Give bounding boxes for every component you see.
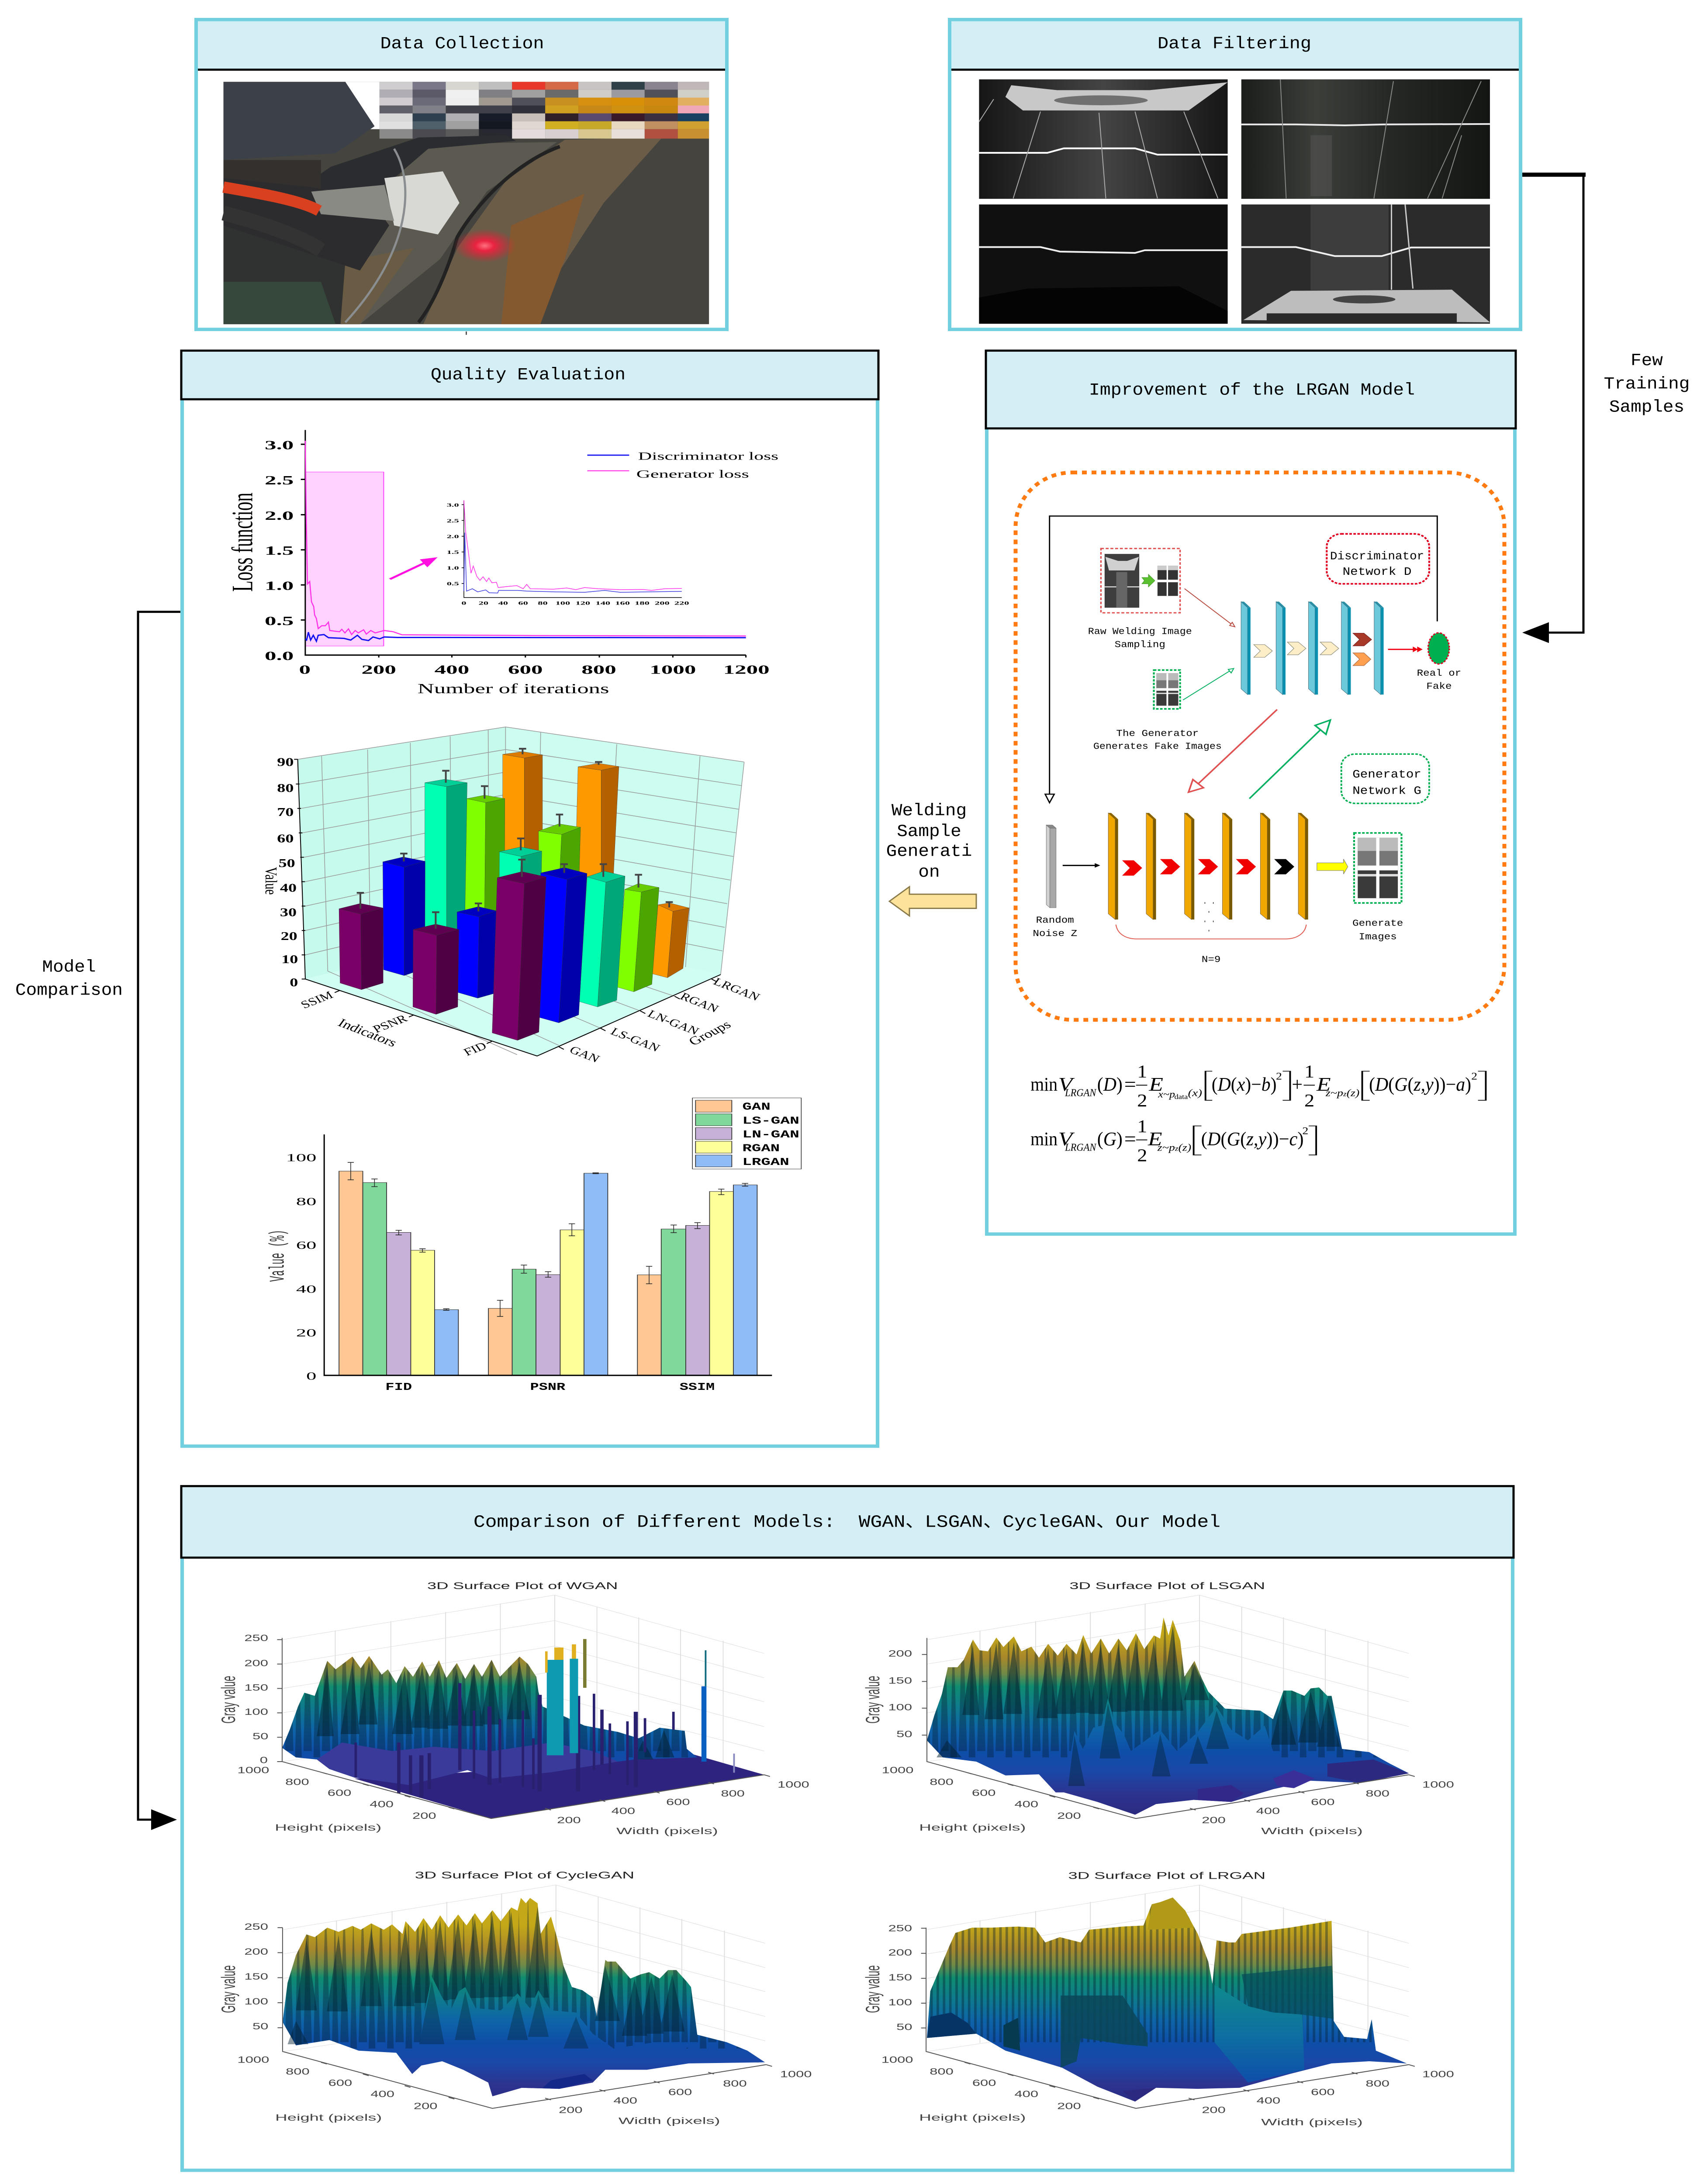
formula: discriminator loss: = (1124, 1073, 1136, 1095)
raw image sampling box (1088, 549, 1192, 650)
heading: data filtering: Data Filtering (1158, 35, 1311, 54)
plot: 3D surface of CycleGAN: 100 (244, 1996, 268, 2007)
plot: 3D surface of LRGAN: 3D Surface Plot of LRGAN (1068, 1870, 1265, 1881)
plot: 3D surface of CycleGAN: Height (pixels) (275, 2112, 382, 2123)
formula: generator loss: 1 (1137, 1116, 1147, 1136)
plot: 3D surface of LSGAN: 400 (1256, 1806, 1280, 1816)
chart: loss function curves: 1200 (723, 663, 770, 677)
legend: LN-GAN (742, 1129, 799, 1140)
plot: 3D surface of LSGAN: Width (pixels) (1261, 1826, 1363, 1836)
chart: 3D bars by indicator and group: RGAN (677, 991, 721, 1015)
chart: grouped bars FID PSNR SSIM: 80 (296, 1196, 316, 1208)
chart: grouped bars FID PSNR SSIM: FID (385, 1381, 412, 1393)
plot: 3D surface of WGAN: 50 (252, 1731, 268, 1742)
plot: 3D surface of CycleGAN: 800 (286, 2067, 310, 2077)
plot: 3D surface of LSGAN: 800 (930, 1777, 954, 1787)
chart: loss function curves: 0.0 (265, 650, 294, 663)
chart: 3D bars by indicator and group: 0 (290, 976, 298, 989)
plot: 3D surface of WGAN: Gray value (218, 1676, 239, 1724)
legend: Discriminator loss (638, 450, 778, 463)
plot: 3D surface of WGAN: 250 (244, 1633, 268, 1643)
bracket: N=9: N=9 (1202, 954, 1220, 965)
plot: 3D surface of CycleGAN: 600 (668, 2087, 692, 2098)
raw image sampling box: Sampling (1115, 639, 1165, 650)
plot: 3D surface of WGAN: 800 (721, 1789, 745, 1799)
formula: discriminator loss: (D(x)−b) (1212, 1073, 1277, 1095)
inset chart: first 220 iterations: 220 (674, 600, 689, 606)
arrow: data filtering to LRGAN model (1522, 173, 1586, 643)
error bars (357, 749, 673, 929)
chart: 3D bars by indicator and group: FID (461, 1040, 489, 1058)
plot: 3D surface of WGAN: 400 (370, 1799, 394, 1810)
generator label (1341, 754, 1429, 803)
discriminator layers (1241, 601, 1384, 695)
label: few training samples: Training (1604, 375, 1690, 394)
legend: LS-GAN (742, 1115, 799, 1127)
random noise block: Random (1036, 915, 1074, 926)
label: welding sample generation: Sample (897, 822, 961, 842)
chart: loss function curves: 3.0 (265, 439, 294, 452)
plot: 3D surface of LSGAN: 200 (1202, 1815, 1226, 1825)
chart: 3D bars by indicator and group: 20 (281, 930, 297, 943)
chart: loss function curves: 600 (508, 663, 543, 677)
plot: 3D surface of LSGAN: 600 (972, 1788, 995, 1798)
formula: generator loss: z~pz(z) (1157, 1142, 1191, 1153)
legend: LRGAN (742, 1156, 789, 1168)
generator label: Network G (1352, 785, 1421, 798)
plot: 3D surface of LRGAN: 200 (1202, 2105, 1226, 2115)
arrow: zoom to inset (390, 557, 438, 579)
real or fake output (1417, 633, 1461, 691)
inset chart: first 220 iterations: 100 (556, 600, 570, 606)
formula: discriminator loss: (x) (1188, 1088, 1202, 1099)
inset chart: first 220 iterations: 20 (479, 600, 488, 606)
arrow: feedback loop (1045, 516, 1437, 803)
chart: 3D bars by indicator and group: Groups (685, 1018, 734, 1048)
label: few training samples: Samples (1609, 398, 1684, 417)
discriminator label: Discriminator (1330, 550, 1424, 563)
fake images box: Generates Fake Images (1093, 741, 1222, 752)
inset chart: first 220 iterations: 0 (461, 600, 467, 606)
chart: loss function curves: 2.5 (265, 473, 294, 487)
chart: grouped bars FID PSNR SSIM: 40 (296, 1283, 316, 1295)
plot: 3D surface of LRGAN: Height (pixels) (919, 2112, 1026, 2123)
arrow: fake samples to discriminator (1183, 668, 1234, 700)
plot: 3D surface of CycleGAN: 1000 (238, 2055, 269, 2065)
discriminator label: Network D (1343, 566, 1411, 579)
chart: grouped bars FID PSNR SSIM (266, 1098, 801, 1393)
plot: 3D surface of LRGAN (862, 1870, 1454, 2128)
formula: discriminator loss: 2 (1304, 1090, 1314, 1110)
plot: 3D surface of CycleGAN: 250 (244, 1921, 268, 1932)
plot: 3D surface of LSGAN: Height (pixels) (919, 1822, 1026, 1833)
diagram: generator and discriminator network (1033, 516, 1461, 965)
plot: 3D surface of CycleGAN: 150 (244, 1971, 268, 1982)
plot: 3D surface of CycleGAN: 3D Surface Plot of CycleGAN (415, 1870, 634, 1881)
plot: 3D surface of LRGAN: 1000 (881, 2055, 913, 2065)
chart: grouped bars FID PSNR SSIM: 60 (296, 1239, 316, 1251)
legend: GAN (742, 1101, 771, 1113)
plot: 3D surface of CycleGAN (218, 1870, 812, 2126)
plot: 3D surface of WGAN: 600 (328, 1788, 351, 1798)
formula: discriminator loss (1030, 1061, 1486, 1110)
formula: discriminator loss: 2 (1471, 1071, 1477, 1082)
chart: loss function curves: 1.0 (265, 579, 294, 593)
label: welding sample generation: Generati (886, 842, 972, 861)
heading: data collection: Data Collection (380, 35, 544, 54)
arrow: yellow output (1317, 859, 1348, 874)
formula: discriminator loss: 1 (1304, 1061, 1314, 1082)
formula: generator loss: V (1058, 1128, 1075, 1150)
chart: grouped bars FID PSNR SSIM: Value (%) (266, 1230, 290, 1282)
plot: 3D surface of LSGAN: 1000 (1422, 1780, 1454, 1790)
chart: loss function curves: 200 (361, 663, 396, 677)
formula: discriminator loss: 2 (1137, 1090, 1147, 1110)
inset chart: first 220 iterations: 40 (498, 600, 508, 606)
chart: 3D bars by indicator and group: Indicators (335, 1016, 400, 1049)
inset chart: first 220 iterations: 2.5 (447, 518, 459, 524)
panel: data collection (194, 18, 729, 335)
chart: loss function curves: 0 (299, 663, 311, 677)
generated images (1352, 833, 1403, 942)
chart: 3D bars by indicator and group: 90 (277, 755, 294, 769)
formula: discriminator loss: x~p (1158, 1089, 1175, 1100)
plot: 3D surface of LRGAN: 50 (896, 2022, 912, 2032)
arrow: generator output to discriminator (1249, 720, 1331, 798)
plot: 3D surface of CycleGAN: 600 (328, 2078, 352, 2088)
real or fake output: Fake (1426, 681, 1452, 691)
inset chart: first 220 iterations: 120 (575, 600, 590, 606)
chart: loss function curves: Number of iterations (418, 681, 609, 697)
label: few training samples (1604, 352, 1690, 417)
chart: 3D bars by indicator and group: 50 (279, 857, 295, 870)
panel: quality evaluation (180, 350, 879, 1448)
bracket: N=9 (1116, 925, 1306, 965)
plot: 3D surface of LRGAN: 1000 (1422, 2069, 1454, 2080)
plot: 3D surface of LRGAN: 800 (1365, 2078, 1389, 2089)
real or fake output: Real or (1417, 668, 1461, 679)
label: model comparison: Model (42, 958, 96, 977)
arrow: noise to generator (1063, 863, 1100, 867)
plot: 3D surface of LRGAN: 150 (888, 1972, 912, 1983)
panel: improvement of the LRGAN model (985, 351, 1517, 1236)
formula: generator loss (1030, 1116, 1316, 1165)
generated images: Images (1359, 932, 1397, 942)
chart: 3D bars by indicator and group: LS-GAN (608, 1026, 662, 1054)
plot: 3D surface of CycleGAN: 800 (723, 2078, 747, 2089)
plot: 3D surface of CycleGAN: 200 (559, 2105, 583, 2115)
formula: generator loss: LRGAN (1065, 1141, 1097, 1153)
plot: 3D surface of LSGAN: 150 (888, 1676, 912, 1686)
plot: 3D surface of WGAN: 200 (244, 1658, 268, 1669)
formula: generator loss: = (1124, 1128, 1136, 1150)
plot: 3D surface of LSGAN: 3D Surface Plot of LSGAN (1069, 1580, 1265, 1591)
formula: discriminator loss: (D) (1097, 1073, 1123, 1095)
plot: 3D surface of WGAN (218, 1580, 809, 1836)
label: model comparison: Comparison (15, 981, 123, 1000)
formula: generator loss: 2 (1302, 1126, 1308, 1137)
plot: 3D surface of CycleGAN: 1000 (780, 2069, 812, 2080)
formula: generator loss: E (1147, 1128, 1162, 1150)
plot: 3D surface of LSGAN: Gray value (862, 1676, 884, 1724)
formula: discriminator loss: z~pz(z) (1325, 1088, 1359, 1099)
plot: 3D surface of WGAN: 100 (244, 1707, 268, 1717)
chart: 3D bars by indicator and group: PSNR (370, 1013, 410, 1035)
plot: 3D surface of CycleGAN: 200 (414, 2101, 437, 2111)
plot: 3D surface of LRGAN: 100 (888, 1997, 912, 2008)
formula: generator loss: (D(G(z,y))−c) (1201, 1128, 1304, 1150)
legend (692, 1098, 801, 1169)
formula: discriminator loss: E (1149, 1073, 1163, 1095)
chart: 3D bars by indicator and group: 10 (281, 953, 298, 966)
formula: discriminator loss: V (1058, 1073, 1075, 1095)
plot: 3D surface of CycleGAN: 400 (613, 2096, 637, 2106)
chart: 3D bars by indicator and group: GAN (567, 1044, 602, 1065)
inset chart: first 220 iterations: 1.5 (447, 549, 459, 555)
plot: 3D surface of WGAN: 1000 (238, 1765, 269, 1776)
heading: comparison of different models: Comparison of Different Models: WGAN、LSGAN、CycleGAN、Our Model (474, 1513, 1220, 1532)
photo: welding robot with laser on pipe (224, 82, 709, 324)
heading: quality evaluation: Quality Evaluation (431, 366, 626, 385)
chart: grouped bars FID PSNR SSIM: PSNR (530, 1381, 565, 1393)
plot: 3D surface of WGAN: 3D Surface Plot of WGAN (427, 1580, 618, 1591)
inset chart: first 220 iterations: 200 (655, 600, 670, 606)
formula: discriminator loss: 1 (1137, 1061, 1147, 1082)
inset chart: first 220 iterations: 2.0 (447, 533, 459, 539)
generator label: Generator (1352, 769, 1421, 781)
formula: discriminator loss: 2 (1276, 1071, 1282, 1082)
inset chart: first 220 iterations: 3.0 (447, 502, 459, 508)
plot: 3D surface of LRGAN: 400 (1015, 2089, 1038, 2099)
legend: RGAN (742, 1142, 780, 1154)
chart: grouped bars FID PSNR SSIM: 20 (296, 1327, 316, 1339)
formula: discriminator loss: LRGAN (1065, 1087, 1097, 1099)
chart: loss function curves: 0.5 (265, 614, 294, 628)
chart: 3D bars by indicator and group: SSIM (298, 989, 335, 1011)
chart: 3D bars by indicator and group (262, 727, 762, 1065)
inset chart: first 220 iterations: 140 (595, 600, 610, 606)
plot: 3D surface of LRGAN: 200 (1057, 2101, 1081, 2111)
formula: LRGAN loss functions (1030, 1061, 1486, 1165)
label: model comparison (15, 958, 123, 1000)
inset chart: first 220 iterations: 0.5 (447, 581, 459, 587)
inset chart: first 220 iterations (447, 501, 689, 606)
arrow: model to welding sample generation (889, 887, 976, 916)
plot: 3D surface of WGAN: 200 (412, 1811, 436, 1821)
plot: 3D surface of LSGAN: 100 (888, 1702, 912, 1713)
plot: 3D surface of WGAN: 400 (612, 1806, 635, 1816)
plot: 3D surface of WGAN: 1000 (778, 1780, 809, 1790)
chart: 3D bars by indicator and group: LRGAN (711, 976, 762, 1003)
generated images: Generate (1352, 918, 1403, 929)
chart: 3D bars by indicator and group: Value (262, 867, 280, 895)
plot: 3D surface of LSGAN: 600 (1311, 1797, 1335, 1807)
raw image sampling box: Raw Welding Image (1088, 626, 1192, 637)
plot: 3D surface of CycleGAN: Width (pixels) (619, 2116, 720, 2126)
plot: 3D surface of LRGAN: 250 (888, 1923, 912, 1933)
arrow: discriminator feedback to generator (1189, 709, 1277, 792)
chart: loss function curves: 400 (435, 663, 469, 677)
plot: 3D surface of WGAN: Height (pixels) (275, 1822, 381, 1833)
plot: 3D surface of WGAN: 600 (666, 1797, 690, 1807)
chart: loss function curves: 2.0 (265, 509, 294, 523)
plot: 3D surface of LRGAN: 400 (1257, 2096, 1280, 2106)
inset chart: first 220 iterations: 60 (518, 600, 528, 606)
plot: 3D surface of LSGAN: 1000 (882, 1765, 913, 1776)
formula: generator loss: (G) (1097, 1128, 1123, 1150)
legend: Generator loss (636, 468, 749, 480)
chart: 3D bars by indicator and group: 40 (280, 881, 297, 895)
chart: 3D bars by indicator and group: 80 (277, 781, 294, 795)
images: four filtered weld laser images (979, 79, 1490, 324)
chart: grouped bars FID PSNR SSIM: SSIM (680, 1381, 715, 1393)
formula: generator loss: 2 (1137, 1145, 1147, 1165)
plot: 3D surface of WGAN: 0 (260, 1755, 268, 1766)
random noise block: Noise Z (1033, 928, 1077, 939)
label: welding sample generation: Welding (892, 802, 967, 821)
chart: loss function curves (226, 430, 778, 697)
plot: 3D surface of WGAN: 800 (285, 1777, 309, 1787)
legend (588, 450, 778, 480)
plot: 3D surface of LSGAN (862, 1580, 1454, 1836)
label: welding sample generation (886, 802, 972, 882)
inset chart: first 220 iterations: 1.0 (447, 565, 459, 571)
formula: generator loss: min (1030, 1128, 1058, 1150)
formula: discriminator loss: data (1174, 1093, 1188, 1101)
fake images box: The Generator (1116, 728, 1199, 739)
plot: 3D surface of LRGAN: 600 (1311, 2087, 1335, 2098)
inset chart: first 220 iterations: 160 (615, 600, 630, 606)
plot: 3D surface of LRGAN: 600 (972, 2078, 996, 2088)
plot: 3D surface of LRGAN: 200 (888, 1948, 912, 1958)
chart: 3D bars by indicator and group: 70 (277, 805, 294, 819)
chart: 3D bars by indicator and group: 30 (280, 905, 297, 919)
arrow: to real or fake (1388, 646, 1423, 652)
plot: 3D surface of LSGAN: 200 (1057, 1811, 1081, 1821)
chart: loss function curves: 800 (581, 663, 616, 677)
plot: 3D surface of LRGAN: Gray value (862, 1965, 884, 2013)
label: few training samples: Few (1631, 352, 1663, 371)
plot: 3D surface of LRGAN: 800 (930, 2067, 954, 2077)
arrow: real samples to discriminator (1185, 589, 1235, 627)
plot: 3D surface of LRGAN: Width (pixels) (1261, 2117, 1363, 2128)
plot: 3D surface of LSGAN: 50 (896, 1729, 912, 1739)
plot: 3D surface of WGAN: 150 (244, 1683, 268, 1693)
chart: loss function curves: 1000 (650, 663, 696, 677)
heading: improvement of the LRGAN model: Improvement of the LRGAN Model (1089, 381, 1415, 400)
chart: 3D bars by indicator and group: LN-GAN (645, 1008, 702, 1037)
panel: data filtering (948, 18, 1522, 331)
container: network diagram dashed frame (1016, 473, 1504, 1020)
chart: grouped bars FID PSNR SSIM: 0 (306, 1370, 316, 1382)
plot: 3D surface of LSGAN: 400 (1015, 1799, 1038, 1810)
inset chart: first 220 iterations: 180 (635, 600, 650, 606)
formula: discriminator loss: + (1292, 1073, 1303, 1095)
bars (339, 752, 689, 1040)
label: welding sample generation: on (918, 863, 940, 882)
panel: comparison of different models (180, 1485, 1514, 2172)
plot: 3D surface of CycleGAN: 200 (244, 1947, 268, 1957)
generator layers (1108, 813, 1308, 931)
plot: 3D surface of CycleGAN: Gray value (218, 1965, 239, 2013)
plot: 3D surface of WGAN: Width (pixels) (616, 1826, 718, 1836)
random noise block (1033, 825, 1077, 939)
chart: loss function curves: 1.5 (265, 544, 294, 558)
formula: discriminator loss: min (1030, 1073, 1058, 1095)
chart: 3D bars by indicator and group: 60 (277, 832, 294, 845)
inset chart: first 220 iterations: 80 (538, 600, 548, 606)
chart: grouped bars FID PSNR SSIM: 100 (286, 1152, 316, 1164)
chart: loss function curves: Loss function (226, 493, 259, 592)
plot: 3D surface of LSGAN: 800 (1365, 1789, 1389, 1799)
arrow: quality evaluation to model comparison (138, 612, 180, 1830)
plot: 3D surface of CycleGAN: 400 (370, 2089, 394, 2099)
formula: discriminator loss: E (1316, 1073, 1331, 1095)
plot: 3D surface of CycleGAN: 50 (252, 2022, 268, 2032)
plot: 3D surface of WGAN: 200 (557, 1815, 581, 1825)
plot: 3D surface of LSGAN: 200 (888, 1648, 912, 1659)
formula: discriminator loss: (D(G(z,y))−a) (1369, 1073, 1471, 1095)
fake images box (1093, 670, 1222, 752)
discriminator label (1327, 534, 1429, 584)
